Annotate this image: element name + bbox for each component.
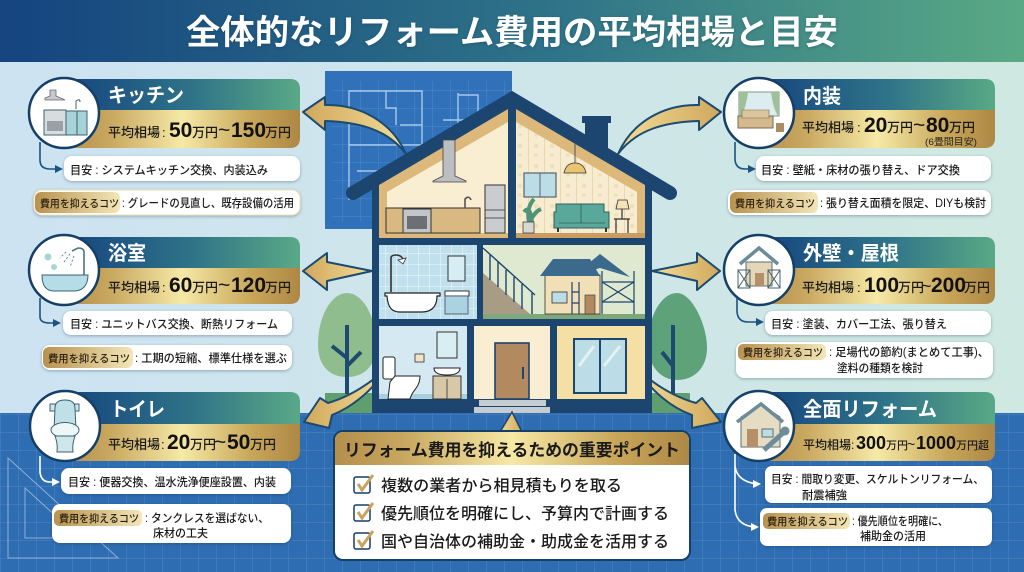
- bathroom price text: ~: [218, 274, 230, 297]
- room: living window: [557, 326, 645, 399]
- interior tip: 費用を抑えるコツ: [735, 197, 815, 210]
- room: entrance: [474, 326, 550, 399]
- whole renovation guide: 耐震補強: [802, 488, 847, 502]
- kitchen name: キッチン: [108, 85, 184, 107]
- bathroom price text: 平均相場: [108, 280, 160, 295]
- bathroom price text: 万円: [192, 280, 218, 295]
- toilet tip: 床材の工夫: [153, 526, 208, 540]
- room: kitchen: [379, 109, 508, 238]
- bathroom name: 浴室: [108, 242, 146, 265]
- toilet price text: 万円: [190, 437, 216, 452]
- house: [353, 99, 670, 413]
- card: toilet: [30, 391, 300, 543]
- whole renovation guide: [765, 466, 992, 503]
- icon: house and wrench: [724, 391, 794, 461]
- kitchen price text: 万円: [265, 125, 291, 140]
- bathroom tip: 費用を抑えるコツ: [48, 352, 130, 365]
- bathroom price text: 120: [231, 274, 266, 297]
- toilet price text: 平均相場: [108, 437, 160, 452]
- kitchen header: [64, 79, 300, 110]
- kitchen tip: [34, 190, 300, 215]
- interior price: [759, 110, 995, 148]
- icon: toilet: [30, 391, 100, 461]
- arrows: [303, 97, 721, 428]
- exterior header: [759, 237, 995, 268]
- connector: [40, 456, 57, 482]
- room: toilet: [379, 326, 467, 399]
- bathroom guide: 目安 : ユニットバス交換、断熱リフォーム: [70, 317, 278, 331]
- kitchen price text: 平均相場: [108, 125, 160, 140]
- exterior price text: ~: [921, 276, 932, 296]
- room: bathroom: [379, 245, 477, 319]
- arrow: to kitchen: [303, 97, 406, 154]
- whole renovation tip: : 優先順位を明確に、: [852, 514, 948, 528]
- card: bathroom: [29, 235, 300, 370]
- whole renovation price text: 万円: [886, 439, 908, 452]
- bathroom price: [64, 268, 300, 304]
- bathroom price text: 60: [169, 274, 192, 297]
- interior price text: :: [857, 120, 861, 135]
- bathroom tip: [42, 345, 292, 370]
- toilet price text: 万円: [250, 437, 276, 452]
- icon: exterior: [724, 235, 794, 305]
- icon: interior: [724, 78, 794, 148]
- toilet tip: 費用を抑えるコツ: [59, 512, 139, 525]
- callout heading bar: [335, 432, 689, 465]
- toilet tip: [52, 504, 291, 543]
- exterior price: [759, 268, 995, 304]
- blueprint backdrop: [325, 71, 512, 229]
- bathroom price text: :: [162, 280, 166, 295]
- exterior price text: 万円: [964, 280, 990, 295]
- whole renovation price text: 1000: [916, 433, 956, 453]
- interior price text: 万円: [887, 120, 913, 135]
- toilet guide: 目安 : 便器交換、温水洗浄便座設置、内装: [68, 475, 276, 489]
- kitchen price text: 150: [231, 119, 266, 142]
- whole renovation name: 全面リフォーム: [803, 398, 937, 421]
- room: stairs and exterior: [483, 245, 645, 319]
- connector: [40, 298, 58, 323]
- interior note: (6畳間目安): [925, 137, 977, 148]
- exterior tip: [736, 342, 993, 378]
- whole renovation guide: 目安 : 間取り変更、スケルトンリフォーム、: [771, 472, 984, 486]
- checklist item 3: 国や自治体の補助金・助成金を活用する: [381, 533, 669, 551]
- arrow: to toilet: [304, 368, 387, 428]
- checklist item 1: 複数の業者から相見積もりを取る: [381, 477, 622, 495]
- card: whole renovation: [724, 391, 995, 546]
- arrow: to bath: [303, 253, 372, 290]
- toilet guide: [61, 468, 291, 494]
- toilet price text: ~: [214, 431, 226, 454]
- whole renovation header: [759, 392, 995, 424]
- toilet tip: : タンクレスを選ばない、: [145, 512, 269, 525]
- interior tip: [728, 190, 991, 215]
- kitchen guide: [64, 156, 300, 181]
- kitchen guide: 目安 : システムキッチン交換、内装込み: [70, 163, 268, 177]
- exterior tip: : 足場代の節約(まとめて工事)、: [829, 345, 989, 359]
- exterior price text: 万円: [898, 280, 924, 295]
- header banner: [0, 0, 1024, 62]
- connector: [735, 142, 753, 169]
- tree: right: [648, 293, 707, 413]
- title: 全体的なリフォーム費用の平均相場と目安: [186, 14, 838, 52]
- arrow: to interior: [618, 97, 721, 154]
- callout heading: リフォーム費用を抑えるための重要ポイント: [344, 440, 680, 460]
- roof: [353, 99, 670, 193]
- checklist item 2: 優先順位を明確にし、予算内で計画する: [381, 504, 669, 523]
- exterior price text: 平均相場: [802, 280, 854, 295]
- connectors: [735, 454, 758, 527]
- whole renovation price: [759, 424, 995, 461]
- whole renovation price text: :: [851, 438, 854, 452]
- arrow: to exterior: [652, 253, 720, 290]
- interior guide: 目安 : 壁紙・床材の張り替え、ドア交換: [761, 163, 960, 177]
- whole renovation tip: 補助金の活用: [860, 529, 926, 543]
- bathroom price text: 万円: [265, 280, 291, 295]
- interior tip: : 張り替え面積を限定、DIYも検討: [820, 196, 986, 210]
- exterior tip: 塗料の種類を検討: [837, 361, 923, 375]
- card: kitchen: [29, 78, 300, 215]
- bathroom tip: : 工期の短縮、標準仕様を選ぶ: [135, 351, 287, 365]
- interior header: [759, 79, 995, 110]
- toilet header: [64, 392, 300, 424]
- kitchen tip: 費用を抑えるコツ: [40, 197, 119, 210]
- room: interior: [516, 109, 645, 238]
- card: exterior and roof: [724, 235, 995, 378]
- bathroom guide: [63, 311, 292, 335]
- exterior tip: 費用を抑えるコツ: [743, 346, 823, 359]
- callout: key points: [334, 412, 690, 560]
- tree: left: [318, 293, 376, 413]
- chimney: [582, 116, 611, 160]
- kitchen price text: ~: [218, 119, 230, 142]
- interior guide: [756, 156, 991, 181]
- whole renovation tip: 費用を抑えるコツ: [767, 515, 848, 528]
- exterior guide: 目安 : 塗装、カバー工法、張り替え: [771, 317, 947, 331]
- whole renovation tip: [760, 508, 992, 546]
- ruler decoration: [8, 458, 118, 558]
- card: interior: [724, 78, 995, 215]
- connector: [40, 142, 60, 169]
- exterior name: 外壁・屋根: [803, 242, 899, 265]
- interior price text: 20: [864, 114, 887, 137]
- kitchen price: [64, 110, 300, 148]
- toilet name: トイレ: [110, 399, 165, 421]
- kitchen price text: 50: [169, 119, 192, 142]
- whole renovation price text: ~: [907, 436, 915, 452]
- steps: [474, 400, 550, 413]
- kitchen price text: 万円: [192, 125, 218, 140]
- toilet price: [64, 424, 300, 461]
- connector: [737, 298, 760, 322]
- interior price text: ~: [913, 114, 925, 137]
- kitchen price text: :: [162, 125, 166, 140]
- interior price text: 万円: [949, 120, 975, 135]
- exterior guide: [765, 311, 991, 335]
- whole renovation price text: 300: [856, 433, 886, 453]
- exterior price text: 100: [864, 274, 899, 297]
- kitchen tip: : グレードの見直し、既存設備の活用: [122, 196, 294, 210]
- toilet price text: :: [161, 437, 165, 452]
- arrow: to whole renovation: [636, 368, 721, 428]
- interior name: 内装: [803, 85, 841, 108]
- interior price text: 80: [926, 114, 949, 137]
- interior price text: 平均相場: [802, 120, 854, 135]
- whole renovation price text: 平均相場: [803, 437, 851, 452]
- whole renovation price text: 万円超: [956, 438, 989, 452]
- exterior price text: 200: [931, 274, 966, 297]
- bathroom header: [64, 237, 300, 268]
- toilet price text: 50: [227, 431, 250, 454]
- icon: bathtub: [29, 235, 99, 305]
- toilet price text: 20: [167, 431, 190, 454]
- icon: kitchen: [29, 78, 99, 148]
- exterior price text: :: [857, 280, 861, 295]
- house walls: [372, 180, 652, 413]
